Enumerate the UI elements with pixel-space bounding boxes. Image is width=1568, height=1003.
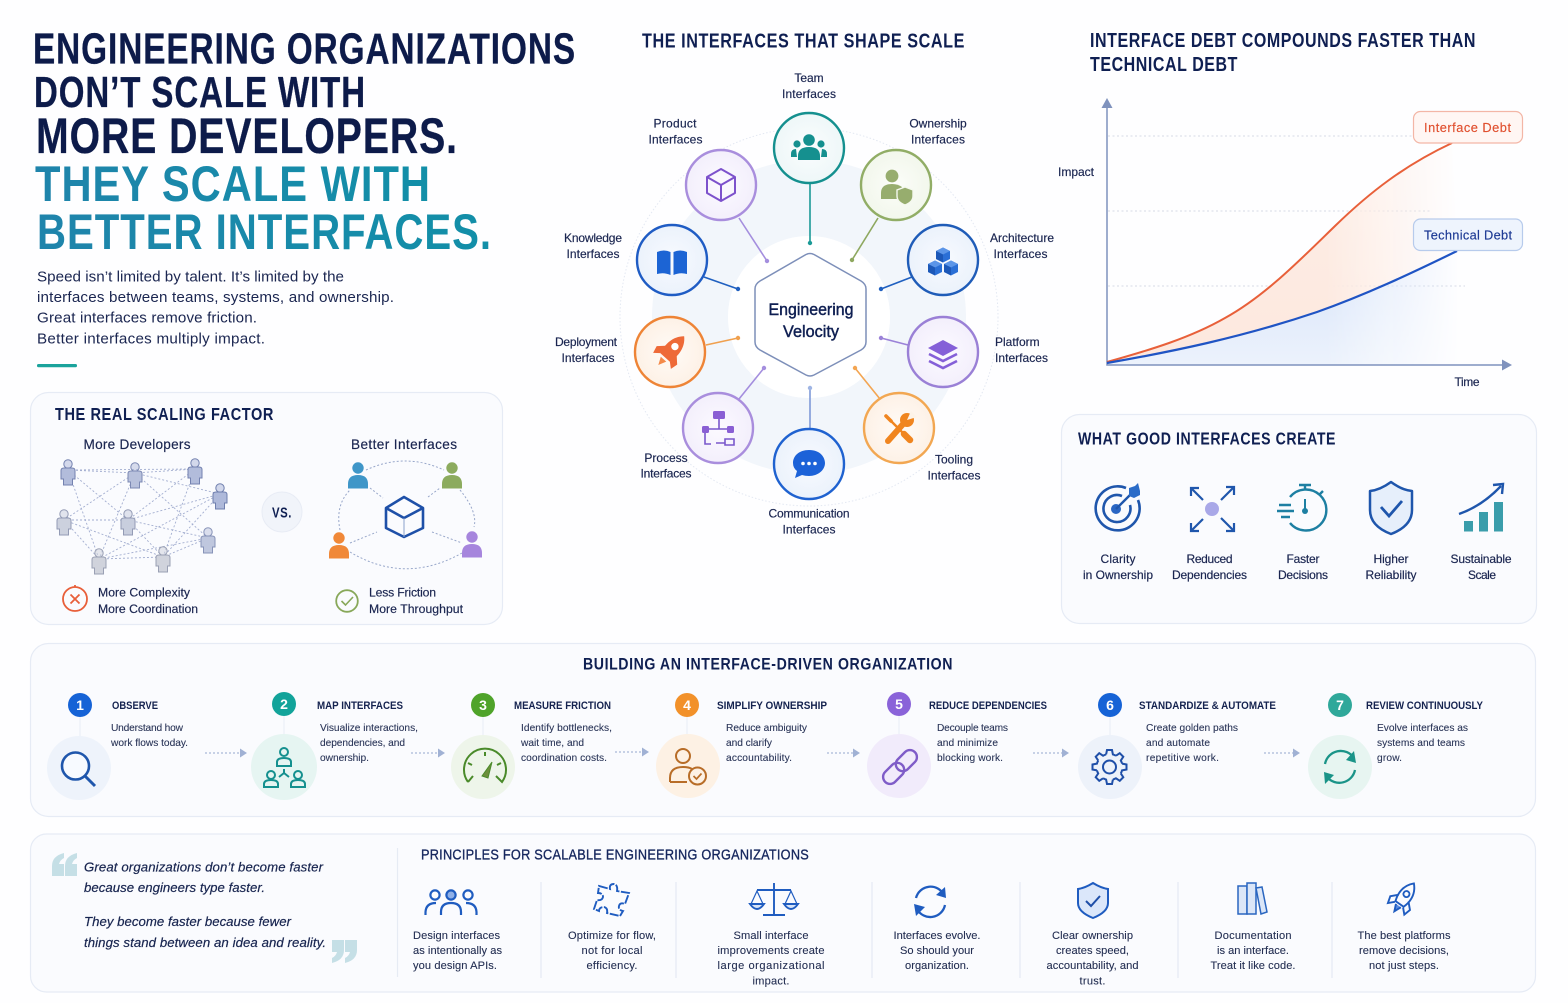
arrow — [411, 748, 445, 758]
node: ownership: Ownership — [909, 116, 967, 130]
step 4: simplify ownership: 4 — [683, 697, 691, 713]
panel heading: WHAT GOOD INTERFACES CREATE — [1078, 428, 1336, 448]
principle: clear ownership: accountability, and — [1046, 960, 1138, 972]
step 4: simplify ownership — [656, 693, 827, 798]
step 4: simplify ownership: and clarify — [726, 738, 773, 749]
network: more developers: More Developers — [84, 437, 191, 452]
node: tooling: Interfaces — [928, 468, 980, 482]
step 7: review continuously: grow. — [1377, 753, 1402, 764]
node: knowledge: Knowledge — [564, 231, 622, 245]
step 2: map interfaces — [251, 692, 418, 800]
step 6: standardize and automate: 6 — [1106, 697, 1114, 713]
panel: quote and principles — [30, 834, 1536, 992]
step 6: standardize and automate: and automate — [1146, 738, 1210, 749]
principle: clear ownership: trust. — [1080, 976, 1106, 988]
step 5: reduce dependencies: Decouple teams — [937, 723, 1008, 734]
node: product — [648, 116, 756, 220]
step 7: review continuously: 7 — [1336, 697, 1344, 713]
node: architecture: Architecture — [990, 231, 1054, 245]
panel heading: THE REAL SCALING FACTOR — [55, 404, 274, 424]
icon: opening quote — [52, 853, 77, 876]
step 2: map interfaces: Visualize interactions, — [320, 723, 418, 734]
hub diagram — [555, 71, 1054, 536]
node: knowledge: Interfaces — [566, 247, 620, 261]
center hexagon: Engineering — [768, 300, 854, 319]
section heading: debt — [1090, 30, 1476, 76]
step 4: simplify ownership: accountability. — [726, 753, 792, 764]
node: team — [774, 71, 844, 183]
node: process: Interfaces — [640, 466, 692, 480]
principle: clear ownership — [1046, 883, 1138, 988]
node: product: Interfaces — [648, 132, 702, 146]
step 6: standardize and automate: STANDARDIZE & AUTOMATE — [1139, 700, 1276, 712]
step 2: map interfaces: ownership. — [320, 753, 369, 764]
step 5: reduce dependencies: blocking work. — [937, 753, 1003, 764]
step 3: measure friction: Identify bottlenecks, — [521, 723, 612, 734]
benefit: clarity: Clarity — [1100, 552, 1136, 566]
node: architecture — [908, 225, 1054, 295]
principle: platforms — [1358, 877, 1451, 972]
principle: platforms: not just steps. — [1369, 960, 1439, 972]
step 5: reduce dependencies: 5 — [895, 696, 903, 712]
step 1: observe: work flows today. — [110, 738, 188, 749]
center hexagon: Velocity — [783, 322, 839, 341]
section heading: debt: INTERFACE DEBT COMPOUNDS FASTER THAN — [1090, 30, 1476, 52]
step 7: review continuously: REVIEW CONTINUOUSLY — [1366, 700, 1483, 712]
node: deployment — [555, 317, 705, 387]
principle: evolve — [894, 887, 980, 972]
benefit: scale — [1450, 484, 1512, 582]
node: process: Process — [644, 451, 688, 465]
panel: what good interfaces create — [1062, 414, 1536, 624]
step 7: review continuously: systems and teams — [1377, 738, 1465, 749]
step 6: standardize and automate: Create golden paths — [1146, 723, 1238, 734]
outcome: friction — [369, 586, 464, 616]
node: platform — [908, 317, 1048, 387]
step 1: observe: 1 — [76, 697, 84, 713]
principle: evolve: Interfaces evolve. — [894, 930, 980, 942]
node: ownership — [861, 116, 967, 220]
intro text: interfaces between teams, systems, and ownership. — [37, 289, 394, 306]
principle: design: you design APIs. — [413, 960, 497, 972]
step 5: reduce dependencies: and minimize — [937, 738, 998, 749]
node: architecture: Interfaces — [994, 247, 1048, 261]
outcome: friction: Less Friction — [369, 586, 436, 600]
step 3: measure friction: wait time, and — [520, 738, 584, 749]
quote text: because engineers type faster. — [84, 880, 265, 895]
step 2: map interfaces: MAP INTERFACES — [317, 700, 403, 712]
principle: documentation: Treat it like code. — [1210, 960, 1296, 972]
outcome: complexity — [98, 586, 198, 616]
node: platform: Platform — [995, 335, 1040, 349]
benefit: reliability — [1366, 482, 1416, 582]
node: ownership: Interfaces — [911, 132, 965, 146]
accent rule — [37, 364, 77, 367]
step 5: reduce dependencies — [867, 692, 1047, 798]
principle: flow: not for local — [582, 945, 642, 957]
node: deployment: Deployment — [555, 335, 618, 349]
step 3: measure friction: MEASURE FRICTION — [514, 700, 611, 712]
icon: check — [336, 590, 358, 612]
step 5: reduce dependencies: REDUCE DEPENDENCIES — [929, 700, 1047, 712]
benefit: decisions: Faster — [1286, 552, 1320, 566]
title: ENGINEERING ORGANIZATIONS — [33, 26, 576, 74]
label: technical debt — [1414, 219, 1522, 250]
label: technical debt: Technical Debt — [1424, 228, 1512, 242]
curve: interface debt — [1107, 143, 1452, 362]
icon: warning cross — [63, 585, 87, 611]
arrow — [1264, 748, 1300, 758]
node: platform: Interfaces — [995, 351, 1048, 365]
axes — [1102, 98, 1512, 370]
axis label: time: Time — [1454, 375, 1480, 389]
principle: documentation: Documentation — [1214, 930, 1292, 942]
principle: small improvements: Small interface — [734, 930, 808, 942]
principle: flow: efficiency. — [586, 960, 638, 972]
title — [33, 26, 576, 260]
step 3: measure friction — [451, 693, 612, 799]
network: more developers — [57, 437, 227, 574]
step 7: review continuously — [1308, 693, 1483, 799]
principle: clear ownership: Clear ownership — [1052, 930, 1133, 942]
title: BETTER INTERFACES. — [37, 203, 492, 260]
principle: small improvements: impact. — [752, 976, 790, 988]
step 7: review continuously: Evolve interfaces as — [1377, 723, 1468, 734]
principles heading: PRINCIPLES FOR SCALABLE ENGINEERING ORGANIZATIONS — [421, 846, 809, 864]
title: MORE DEVELOPERS. — [36, 107, 458, 164]
panel: building an interface-driven organization — [30, 644, 1536, 816]
node: tooling: Tooling — [935, 452, 973, 466]
benefit: scale: Sustainable — [1450, 552, 1512, 566]
node: team: Team — [794, 71, 824, 85]
principle: design: Design interfaces — [413, 930, 500, 942]
step 1: observe: Understand how — [111, 723, 184, 734]
principle: evolve: So should your — [900, 945, 974, 957]
arrow — [827, 748, 860, 758]
quote text: They become faster because fewer — [84, 914, 292, 929]
panel: the real scaling factor — [30, 392, 502, 624]
icon: cube — [386, 497, 423, 537]
principle: small improvements — [718, 883, 824, 988]
benefit: dependencies: Dependencies — [1172, 568, 1247, 582]
principle: evolve: organization. — [905, 960, 969, 972]
benefit: decisions — [1277, 485, 1328, 582]
principle: platforms: remove decisions, — [1359, 945, 1449, 957]
title: DON’T SCALE WITH — [34, 69, 366, 117]
spokes — [704, 184, 912, 428]
vs badge: VS. — [272, 506, 292, 522]
node: process — [640, 393, 753, 480]
arrow — [615, 748, 649, 756]
outcome: complexity: More Coordination — [98, 602, 198, 616]
benefit: clarity — [1083, 483, 1153, 582]
node: communication — [768, 429, 850, 536]
quote text: things stand between an idea and reality. — [84, 935, 326, 950]
section heading: debt: TECHNICAL DEBT — [1090, 54, 1238, 76]
step 6: standardize and automate — [1078, 693, 1276, 799]
step 4: simplify ownership: Reduce ambiguity — [726, 723, 808, 734]
node: knowledge — [564, 225, 707, 295]
benefit: dependencies: Reduced — [1186, 552, 1232, 566]
step 2: map interfaces: 2 — [280, 696, 288, 712]
node: deployment: Interfaces — [562, 351, 614, 365]
intro text: Speed isn’t limited by talent. It’s limited by the — [37, 268, 344, 286]
vs badge — [262, 492, 302, 532]
principle: documentation: is an interface. — [1217, 945, 1289, 957]
node: product: Product — [654, 116, 697, 130]
step 6: standardize and automate: repetitive work. — [1146, 753, 1219, 764]
title: THEY SCALE WITH — [35, 155, 431, 212]
node: communication: Communication — [768, 506, 850, 520]
benefit: reliability: Reliability — [1366, 568, 1416, 582]
benefit: scale: Scale — [1468, 568, 1496, 582]
step 2: map interfaces: dependencies, and — [320, 738, 405, 749]
axis label: impact: Impact — [1058, 165, 1095, 179]
network: better interfaces — [329, 437, 482, 569]
step 3: measure friction: coordination costs. — [521, 753, 607, 764]
step 1: observe — [47, 693, 188, 800]
intro text: Better interfaces multiply impact. — [37, 330, 265, 348]
outcome: complexity: More Complexity — [98, 586, 191, 600]
section heading: interfaces: THE INTERFACES THAT SHAPE SCALE — [642, 30, 965, 52]
arrow — [205, 748, 247, 758]
line chart: debt — [1058, 98, 1522, 389]
benefit: clarity: in Ownership — [1083, 568, 1153, 582]
step 4: simplify ownership: SIMPLIFY OWNERSHIP — [717, 700, 827, 712]
principle: platforms: The best platforms — [1358, 930, 1451, 942]
principle: small improvements: large organizational — [718, 960, 824, 972]
node: team: Interfaces — [782, 87, 836, 101]
icon: closing quote — [332, 940, 357, 963]
intro text — [37, 268, 394, 348]
panel heading: BUILDING AN INTERFACE-DRIVEN ORGANIZATION — [583, 654, 953, 674]
intro text: Great interfaces remove friction. — [37, 310, 257, 326]
network: better interfaces: Better Interfaces — [351, 437, 457, 452]
quote text: Great organizations don’t become faster — [84, 860, 324, 874]
principle: flow: Optimize for flow, — [568, 930, 656, 942]
label: interface debt — [1414, 112, 1522, 143]
label: interface debt: Interface Debt — [1424, 120, 1511, 135]
quote text — [84, 860, 326, 950]
principle: design: as intentionally as — [413, 945, 502, 957]
arrow — [1033, 748, 1069, 758]
node: communication: Interfaces — [782, 522, 836, 536]
benefit: dependencies — [1172, 487, 1247, 582]
area under technical debt — [1108, 266, 1430, 364]
principle: design — [413, 890, 502, 972]
principle: clear ownership: creates speed, — [1056, 945, 1129, 957]
benefit: decisions: Decisions — [1278, 568, 1328, 582]
curve: technical debt — [1107, 251, 1457, 363]
center hexagon — [755, 254, 866, 376]
benefit: reliability: Higher — [1374, 552, 1408, 566]
principle: small improvements: improvements create — [718, 945, 824, 957]
principle: flow — [568, 884, 656, 972]
area between curves — [1118, 164, 1430, 360]
step 1: observe: OBSERVE — [112, 700, 158, 712]
node: tooling — [864, 393, 980, 482]
step 3: measure friction: 3 — [479, 697, 487, 713]
outcome: friction: More Throughput — [369, 602, 464, 616]
principle: documentation — [1210, 883, 1296, 972]
